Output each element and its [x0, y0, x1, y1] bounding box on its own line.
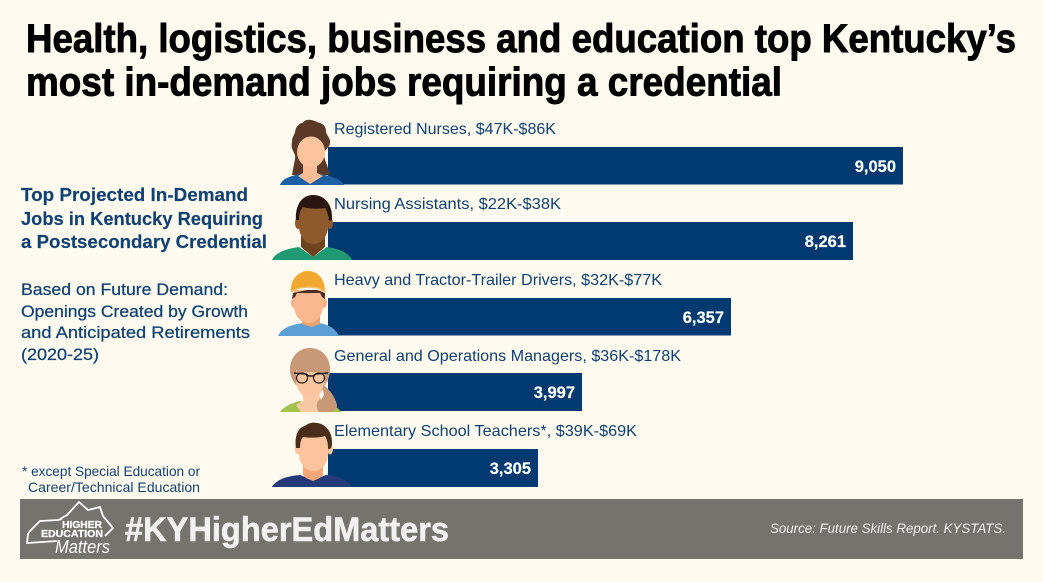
icon: operations manager: [280, 348, 341, 412]
bar chart: [328, 121, 903, 487]
bar: registered nurses: [328, 121, 903, 184]
bar: nursing assistants: 8,261: [805, 233, 846, 251]
title: [26, 17, 1016, 104]
chart subheading: and Anticipated Retirements: [21, 323, 250, 342]
icon: elementary teacher: [272, 423, 352, 487]
footnote: Career/Technical Education: [28, 479, 200, 495]
logo: Higher Education Matters: [27, 502, 113, 557]
bar: registered nurses: Registered Nurses, $47K-$86K: [334, 121, 556, 138]
bar: elementary teachers: Elementary School Teachers*, $39K-$69K: [334, 423, 637, 440]
bar: truck drivers: 6,357: [683, 309, 724, 327]
footnote: * except Special Education or: [22, 463, 200, 479]
bar: truck drivers: [328, 272, 731, 336]
bar: registered nurses: 9,050: [855, 158, 896, 176]
icon: registered nurse: [280, 120, 344, 185]
chart heading: a Postsecondary Credential: [21, 231, 267, 252]
chart subheading: Openings Created by Growth: [21, 302, 248, 321]
title: most in-demand jobs requiring a credential: [26, 60, 782, 104]
chart heading: Jobs in Kentucky Requiring: [21, 208, 263, 229]
bar: operations managers: General and Operations Managers, $36K-$178K: [334, 348, 681, 365]
bar: truck drivers: Heavy and Tractor-Trailer Drivers, $32K-$77K: [334, 272, 662, 289]
bar: nursing assistants: [328, 196, 853, 260]
logo: Higher Education Matters: EDUCATION: [41, 529, 103, 540]
bar: elementary teachers: 3,305: [490, 460, 531, 478]
chart subheading: [21, 280, 250, 364]
icon: truck driver: [278, 271, 339, 336]
source: Source: Future Skills Report. KYSTATS.: [770, 520, 1006, 536]
footnote: [22, 463, 200, 495]
chart heading: Top Projected In-Demand: [21, 184, 248, 205]
footer band: [20, 499, 1023, 559]
bar: elementary teachers: [328, 423, 637, 487]
bar: operations managers: 3,997: [534, 384, 575, 402]
hashtag: #KYHigherEdMatters: [125, 511, 449, 549]
chart heading: [21, 184, 267, 252]
chart subheading: Based on Future Demand:: [21, 280, 228, 299]
icon: nursing assistant: [272, 195, 352, 260]
bar: operations managers: [328, 348, 681, 411]
bar: nursing assistants: Nursing Assistants, $22K-$38K: [334, 196, 561, 213]
logo: Higher Education Matters: HIGHER: [62, 520, 103, 531]
chart subheading: (2020-25): [21, 345, 99, 364]
logo: Higher Education Matters: Matters: [55, 537, 110, 557]
